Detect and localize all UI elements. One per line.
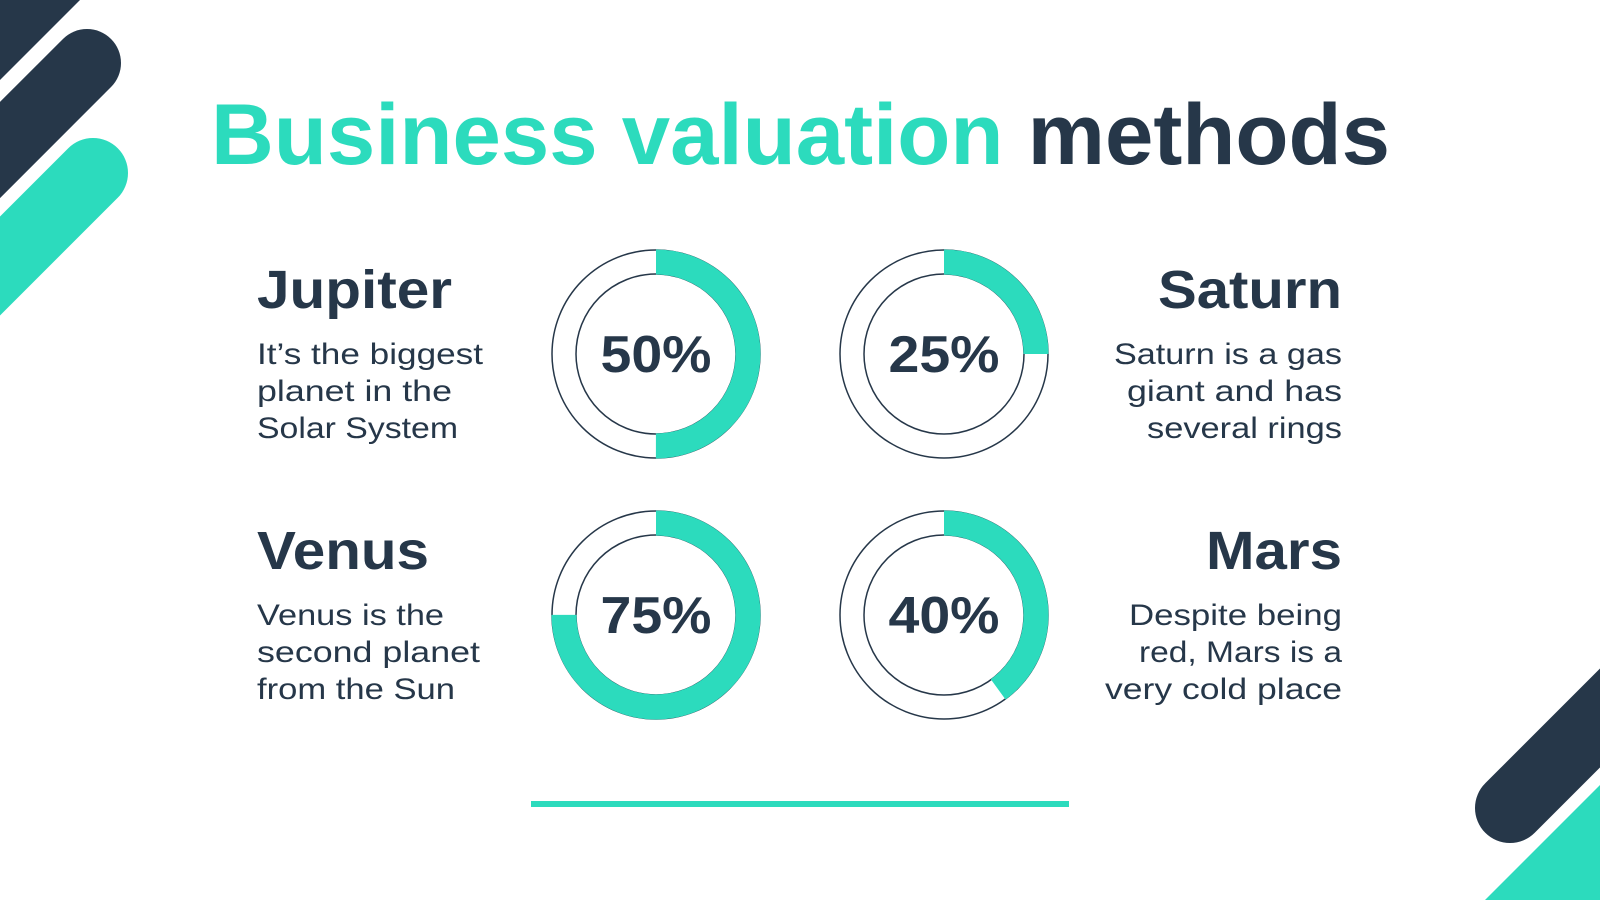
decoration: top-left stripes	[0, 0, 93, 346]
item: Venus: Venus	[257, 521, 429, 581]
item: Saturn	[1114, 260, 1342, 445]
item: Mars: very cold place	[1105, 673, 1342, 706]
bottom accent line	[531, 801, 1069, 807]
item: Mars: Mars	[1206, 521, 1342, 581]
item: Venus	[257, 521, 481, 706]
item: Venus: from the Sun	[257, 673, 455, 706]
item: Jupiter: It’s the biggest	[257, 338, 484, 371]
item: Saturn: several rings	[1147, 412, 1342, 445]
donut: 40%: 40%	[888, 587, 1000, 645]
item: Venus: Venus is the	[257, 599, 444, 632]
donut: 75%	[552, 511, 760, 719]
donut: 75%: 75%	[600, 587, 712, 645]
item: Saturn: Saturn is a gas	[1114, 338, 1342, 371]
item: Saturn: Saturn	[1158, 260, 1342, 320]
donut: 25%	[840, 250, 1048, 458]
item: Mars: red, Mars is a	[1139, 636, 1342, 669]
donut: 25%: 25%	[888, 326, 1000, 384]
title: Business valuation methods	[211, 87, 1390, 183]
donut: 50%: 50%	[600, 326, 712, 384]
donut: 50%	[552, 250, 760, 458]
decoration: bottom-right stripes	[1485, 658, 1600, 900]
donut: 40%	[840, 511, 1048, 719]
item: Venus: second planet	[257, 636, 481, 669]
item: Saturn: giant and has	[1127, 375, 1342, 408]
item: Jupiter: Jupiter	[257, 260, 452, 320]
item: Jupiter	[257, 260, 484, 445]
item: Mars	[1105, 521, 1342, 706]
item: Mars: Despite being	[1129, 599, 1342, 632]
item: Jupiter: planet in the	[257, 375, 452, 408]
item: Jupiter: Solar System	[257, 412, 458, 445]
